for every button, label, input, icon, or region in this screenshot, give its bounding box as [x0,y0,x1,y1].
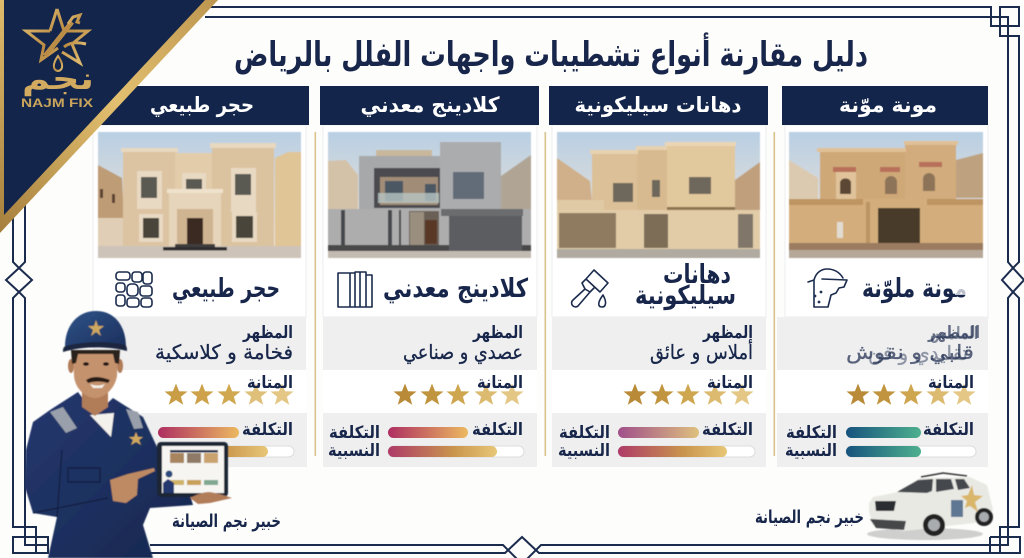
icon: cladding panels [338,272,372,307]
hair [71,350,120,364]
navy triangle [4,0,205,215]
card frame [785,125,988,317]
durability rating: المتانة [707,373,753,393]
card frame [93,125,306,317]
card frame [552,125,766,317]
card frame [323,125,537,317]
rear rim [979,512,989,522]
cost bars [93,413,307,467]
reflective strips [50,407,77,433]
header text: دهانات سيليكونية [574,93,742,117]
appearance row: الملمس [930,324,978,344]
header text: كلادينج معدني [360,93,500,117]
cost bars: النسبية [558,441,610,461]
photo: stone villa [98,132,301,258]
panel: coloured render [777,86,988,467]
header [549,86,768,125]
rear wheel [975,508,993,526]
appearance row [323,317,537,370]
header [95,86,309,125]
panel: natural stone [93,86,309,467]
photo: painted villa [557,132,760,258]
durability rating: المتانة [928,373,974,393]
neck [82,388,108,416]
right eye [103,362,109,366]
shirt [90,413,114,437]
car caption: خبير نجم الصيانة [755,507,864,528]
appearance row: المظهر [927,323,980,343]
hat brim [63,342,127,352]
arm seam [33,450,108,517]
cost bars: التكلفة [242,420,293,440]
cost bars: التكلفة [702,420,753,440]
cost bars: النسبية [785,441,837,461]
appearance row: قلبي و نقوش [846,340,974,365]
face [73,350,118,398]
durability rating [93,370,306,413]
technician caption: خبير نجم الصيانة [172,511,281,532]
cost bars: التكلفة [559,423,610,443]
appearance row: المظهر [702,323,753,343]
appearance row [93,317,306,370]
durability rating: المتانة [477,373,523,393]
appearance row: المظهر [242,323,293,343]
durability rating [323,370,537,413]
header text: مونة موّنة [839,93,937,117]
car door logo [951,500,963,517]
appearance row: عصدي و صناعي [403,340,523,365]
tablet [157,442,228,497]
heading text line 1: دهانات [663,260,731,290]
windows [897,479,970,493]
roof rails [921,473,967,477]
appearance row [552,317,766,370]
header [782,86,988,125]
heading text line 2: سيليكونية [635,281,736,311]
heading text: كلادينج معدني [383,274,529,304]
appearance row [777,317,988,370]
lower bumper [870,519,906,530]
shadow [867,528,983,540]
panel: silicone paints [549,86,768,467]
logo latin wordmark: NAJM FIX [21,96,93,110]
right ear [117,359,123,373]
appearance row: أملاس و عائق [650,339,753,364]
coverall [25,392,193,558]
durability rating: المتانة [247,373,293,393]
cost bars [323,413,537,467]
left ear [68,359,74,373]
icon: paint brush [572,270,608,307]
logo corner [0,0,218,233]
pointing hand [110,468,155,503]
front rim [928,519,940,531]
appearance row: تقليدي و فن [868,341,968,366]
grille [875,501,896,511]
supporting hand [190,492,232,504]
heading smudge [955,281,971,295]
header [320,86,539,125]
logo star [26,9,88,71]
technician figure [25,311,232,558]
photo: clad villa [328,132,531,258]
moustache [86,377,110,383]
photo: render villa [789,132,983,258]
appearance row: فخامة و كلاسكية [155,340,293,364]
chest emblem [129,432,143,445]
gold dividers [314,132,775,456]
cost bars: التكلفة [923,420,974,440]
cost bars: التكلفة [472,420,523,440]
heading text: مونة ملوّنة [862,274,967,304]
left eye [83,362,89,366]
body [869,477,993,531]
cost bars [552,413,766,467]
icon: stone wall [116,272,152,307]
header text: حجر طبيعي [150,93,254,117]
heading text: حجر طبيعي [172,274,280,304]
appearance row: المظهر [472,323,523,343]
car star decal [961,485,983,512]
cost bars [777,413,988,467]
durability rating [777,370,988,413]
hat emblem [88,320,104,336]
gold band [0,0,218,233]
front wheel [923,514,945,536]
cost bars: التكلفة [329,423,380,443]
durability rating [552,370,766,413]
cost bars: التكلفة [786,423,837,443]
panel: metal cladding [320,86,539,467]
icon: render sack [808,269,847,307]
hard hat [65,311,126,347]
smile [90,384,105,388]
cost bars: النسبية [328,441,380,461]
service car [867,473,993,540]
logo arabic wordmark: نجم [22,62,94,97]
